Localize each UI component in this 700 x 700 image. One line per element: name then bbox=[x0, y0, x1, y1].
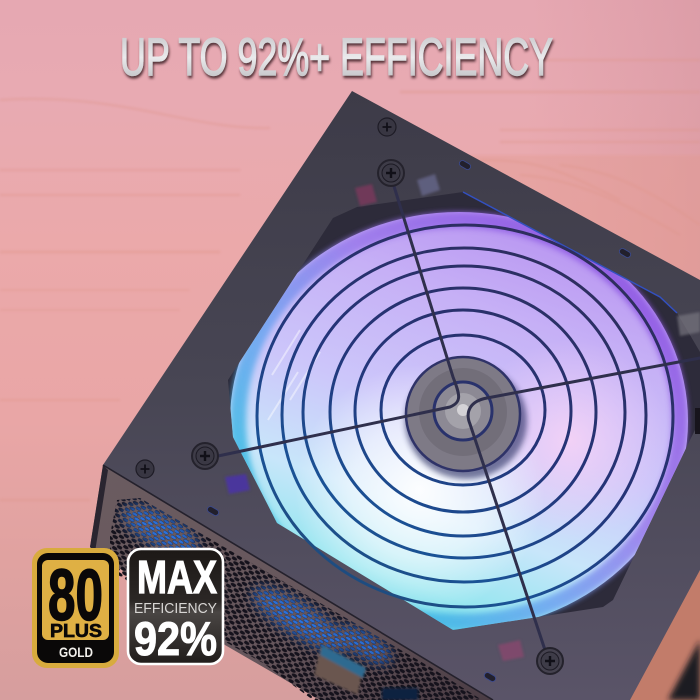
opening lit edge bbox=[463, 192, 677, 313]
panel slots bbox=[206, 159, 632, 683]
fan opening and glowing fan bbox=[225, 174, 700, 661]
connector visible through the side bbox=[314, 645, 366, 695]
badge: 80 Plus Gold bbox=[32, 548, 119, 668]
screw: left corner bbox=[136, 460, 154, 478]
badge: Max Efficiency 92%: EFFICIENCY bbox=[134, 601, 217, 617]
badge: Max Efficiency 92%: MAX bbox=[137, 551, 217, 603]
background dark object, bottom right bbox=[668, 640, 700, 700]
tape pieces bbox=[225, 174, 700, 661]
screw: bottom grille bbox=[537, 648, 563, 674]
PSU top panel bbox=[103, 91, 700, 700]
grille cross wires bbox=[218, 183, 700, 650]
badge: Max Efficiency 92% bbox=[128, 549, 223, 665]
screw: top corner bbox=[378, 118, 396, 136]
screw: left grille bbox=[192, 443, 218, 469]
glow blades bbox=[230, 212, 688, 630]
PSU side panel with perforation bbox=[90, 465, 493, 700]
right edge latch bbox=[695, 408, 700, 434]
wood strip, bottom right bbox=[620, 560, 700, 700]
grille rings bbox=[257, 225, 673, 607]
badge: 80 Plus Gold: 80 bbox=[48, 556, 103, 636]
hub bbox=[405, 357, 527, 479]
opening bbox=[228, 192, 700, 630]
badge: Max Efficiency 92%: 92% bbox=[134, 612, 217, 665]
badge: 80 Plus Gold: PLUS bbox=[50, 620, 102, 641]
badge: 80 Plus Gold: GOLD bbox=[59, 644, 93, 660]
screw: top grille bbox=[378, 160, 404, 186]
panel front edge bbox=[103, 465, 493, 700]
